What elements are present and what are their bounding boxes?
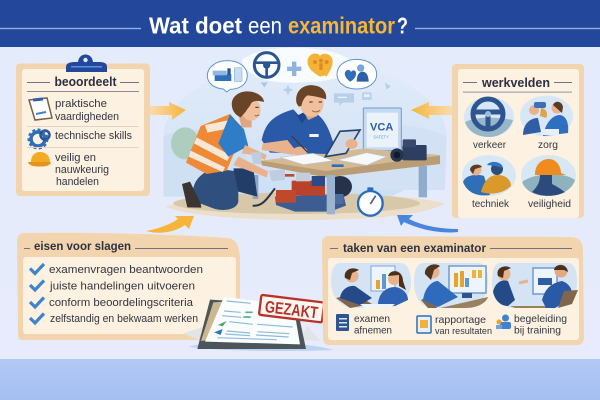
heading: taken van een examinator: taken van een examinator bbox=[343, 241, 486, 255]
camera bbox=[390, 139, 427, 162]
equipment case bbox=[253, 173, 352, 212]
VCA safety sign bbox=[363, 108, 401, 151]
failed exam on tablet bbox=[183, 295, 333, 351]
task: rapportage van resultaten: rapportage bbox=[435, 314, 486, 326]
VCA safety sign: VCA bbox=[370, 122, 394, 134]
arrow: scene to bottom left bbox=[146, 216, 194, 233]
requirement 3: conform beoordelingscriteria bbox=[49, 297, 194, 309]
small floating icons bbox=[261, 82, 391, 106]
field: verkeer bbox=[464, 97, 514, 151]
label: zorg bbox=[538, 139, 558, 151]
arrow: scene to bottom right bbox=[397, 215, 458, 232]
task: rapportage van resultaten: van resultaten bbox=[435, 326, 492, 337]
panel: eisen voor slagen bbox=[17, 233, 240, 340]
icon: heart with people bbox=[308, 54, 333, 77]
tablet and papers bbox=[280, 130, 387, 167]
text: veilig en nauwkeurig handelen: handelen bbox=[56, 176, 99, 188]
icon: steering wheel bbox=[254, 53, 279, 77]
title: ? bbox=[397, 12, 408, 38]
text: veilig en nauwkeurig handelen: veilig en bbox=[55, 152, 96, 164]
field: zorg bbox=[520, 96, 573, 151]
requirement 2: juiste handelingen uitvoeren bbox=[49, 280, 195, 292]
task: begeleiding bij training: bij training bbox=[514, 324, 561, 336]
task: rapportage van resultaten bbox=[417, 314, 492, 337]
task: examen afnemen bbox=[336, 313, 392, 336]
speech bubble: care bbox=[337, 59, 377, 89]
panel: taken van een examinator bbox=[322, 236, 584, 345]
label: verkeer bbox=[473, 139, 506, 151]
task: examen afnemen: afnemen bbox=[354, 324, 392, 336]
scene: rapportage bbox=[414, 263, 488, 308]
VCA safety sign: SAFETY bbox=[373, 134, 389, 140]
text: technische skills: technische skills bbox=[55, 130, 132, 142]
panel: beoordeelt bbox=[16, 54, 150, 196]
central scene illustration bbox=[163, 48, 447, 220]
field: veiligheid bbox=[521, 155, 576, 210]
panel: werkvelden bbox=[452, 64, 584, 218]
text: praktische vaardigheden bbox=[55, 98, 119, 123]
icon: clipboard checklist bbox=[29, 97, 52, 120]
title: examinator bbox=[288, 12, 395, 38]
title: Wat doet bbox=[149, 12, 242, 38]
stopwatch bbox=[358, 187, 383, 216]
title bbox=[149, 12, 408, 38]
heading: werkvelden: werkvelden bbox=[481, 76, 550, 90]
text: veilig en nauwkeurig handelen bbox=[55, 152, 109, 188]
task: examen afnemen: examen bbox=[354, 313, 390, 325]
header banner bbox=[0, 0, 600, 47]
cloud with thought icons bbox=[207, 48, 391, 106]
task: begeleiding bij training bbox=[496, 313, 567, 336]
scene background bbox=[163, 62, 447, 220]
front desk leg bbox=[327, 175, 335, 214]
task: begeleiding bij training: begeleiding bbox=[514, 313, 567, 325]
heading: eisen voor slagen: eisen voor slagen bbox=[34, 239, 131, 253]
requirement 1: examenvragen beantwoorden bbox=[49, 264, 203, 276]
scene: begeleiding bbox=[492, 263, 578, 308]
arrow: left panel to scene bbox=[150, 102, 186, 120]
person: technician in orange vest bbox=[182, 91, 294, 210]
icon: plus bbox=[287, 62, 301, 76]
desk bbox=[253, 149, 440, 199]
label: veiligheid bbox=[528, 198, 571, 210]
stamp: GEZAKT: GEZAKT bbox=[264, 297, 319, 323]
title: een bbox=[248, 12, 282, 38]
requirement 4: zelfstandig en bekwaam werken bbox=[50, 313, 198, 325]
field: techniek bbox=[462, 155, 516, 210]
scene: examen afnemen bbox=[331, 263, 411, 308]
text: veilig en nauwkeurig handelen: nauwkeurig bbox=[55, 164, 109, 176]
bottom band bbox=[0, 359, 600, 400]
person: examiner in blue polo bbox=[262, 85, 335, 156]
icon: gear bbox=[28, 130, 50, 148]
icon: hard hat bbox=[28, 152, 51, 166]
speech bubble: equipment bbox=[207, 61, 247, 92]
clipboard clip bbox=[66, 54, 107, 72]
text: praktische vaardigheden: vaardigheden bbox=[55, 111, 119, 123]
text: praktische vaardigheden: praktische bbox=[55, 98, 107, 110]
label: techniek bbox=[472, 198, 510, 210]
heading: beoordeelt: beoordeelt bbox=[54, 75, 117, 89]
arrow: right panel to scene bbox=[411, 102, 452, 119]
